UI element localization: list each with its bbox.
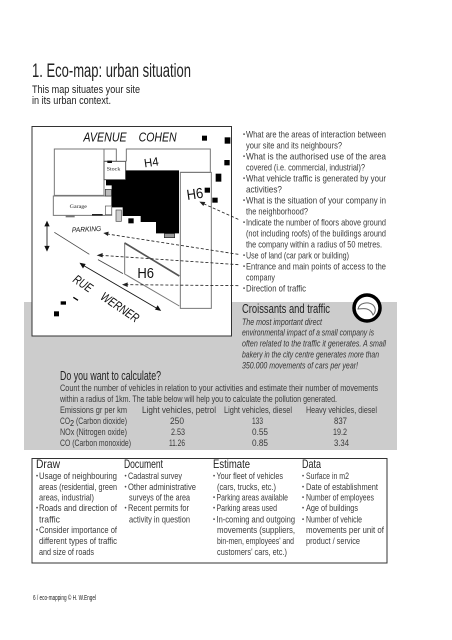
- column: estimate: customers' cars, etc.): [217, 547, 287, 558]
- double arrow: parking: [45, 222, 49, 251]
- column: draw: Draw: [36, 457, 60, 471]
- dashed leader lines: [101, 203, 238, 286]
- subtitle: This map situates your site: [32, 84, 140, 96]
- column: document: •: [124, 485, 127, 491]
- column: draw: areas, industrial): [39, 492, 94, 504]
- trees: [54, 136, 230, 316]
- column: estimate: In-coming and outgoing: [216, 514, 295, 526]
- column: data: •: [302, 485, 304, 491]
- emissions table: 11.26: [169, 438, 185, 449]
- question list: company: [246, 272, 275, 284]
- footer: 6 / eco-mapping © H. W.Engel: [33, 594, 96, 602]
- emissions table: (Carbon dioxide): [76, 416, 127, 427]
- question list: Use of land (car park or building): [246, 250, 349, 262]
- emissions table: CO (Carbon monoxide): [60, 438, 131, 449]
- column: document: Other administrative: [128, 482, 196, 493]
- building label: H6 lower: H6: [137, 266, 154, 282]
- question list: [243, 130, 387, 294]
- emissions table: CO: [60, 416, 70, 427]
- column: data: •: [302, 506, 304, 512]
- column: draw: •: [36, 474, 38, 480]
- question list: What is the situation of your company in: [246, 196, 386, 206]
- callout: croissants and traffic: bakery in the city centre generates more than: [242, 350, 379, 360]
- callout: croissants and traffic: often related to the traffic it generates. A small: [242, 338, 387, 348]
- question list: the company within a radius of 50 metres.: [246, 240, 382, 250]
- callout: croissants and traffic: environmental impact of a small company is: [242, 328, 374, 338]
- panel: urban map: [32, 126, 238, 336]
- callout: croissants and traffic: 350.000 movements of cars per year!: [242, 360, 358, 370]
- heading: do you want to calculate: Do you want to calculate?: [60, 369, 161, 383]
- question list: •: [243, 154, 245, 160]
- street label: Rue Werner: RUE: [70, 272, 96, 296]
- column: document: Cadastral survey: [128, 471, 182, 482]
- column: estimate: •: [213, 506, 215, 512]
- question list: your site and its neighbours?: [246, 140, 342, 152]
- column: document: •: [124, 474, 127, 480]
- column: data: Number of vehicle: [306, 514, 362, 526]
- question list: •: [243, 286, 245, 292]
- emissions table: [60, 405, 377, 449]
- arrow: direction of traffic: [80, 263, 160, 310]
- emissions table: 2: [70, 419, 74, 428]
- question list: covered (i.e. commercial, industrial)?: [246, 162, 365, 174]
- question list: activities?: [246, 184, 282, 196]
- column: estimate: bin-men, employees' and: [217, 536, 294, 547]
- question list: •: [243, 132, 245, 138]
- column: data: •: [302, 496, 304, 502]
- question list: What vehicle traffic is generated by your: [246, 174, 386, 184]
- grey background band: [24, 302, 397, 450]
- emissions table: Heavy vehicles, diesel: [306, 405, 377, 416]
- column: data: [302, 457, 384, 547]
- column: estimate: Estimate: [213, 457, 250, 471]
- street label: Avenue Cohen: COHEN: [139, 131, 177, 145]
- calculation intro text: within a radius of 1km. The table below will help you to calculate the pollution generated.: [59, 394, 337, 405]
- column: estimate: •: [213, 518, 215, 524]
- title: 1. Eco-map: urban situation: [32, 61, 191, 82]
- column: draw: and size of roads: [39, 547, 94, 558]
- callout: croissants and traffic: Croissants and traffic: [242, 302, 330, 316]
- column: data: Number of employees: [306, 492, 374, 504]
- emissions table: 2.53: [171, 427, 185, 438]
- small details: [66, 161, 175, 238]
- street label: Rue Werner: WERNER: [98, 290, 142, 325]
- column: document: Recent permits for: [128, 503, 189, 514]
- column: draw: Usage of neighbouring: [39, 471, 117, 482]
- emissions table: 3.34: [334, 438, 349, 449]
- column: document: activity in question: [129, 514, 190, 526]
- column: document: [124, 457, 196, 526]
- column: data: •: [302, 518, 304, 524]
- column: data: Age of buildings: [306, 503, 358, 514]
- emissions table: 19.2: [333, 427, 347, 438]
- column: data: Surface in m2: [306, 471, 349, 482]
- street label: Rue Werner: [70, 272, 142, 325]
- column: data: movements per unit of: [306, 525, 384, 536]
- emissions table: 250: [170, 416, 184, 427]
- building label: H6 upper: H6: [186, 186, 204, 204]
- street label: Avenue Cohen: AVENUE: [82, 131, 127, 145]
- callout: croissants and traffic: [242, 302, 387, 370]
- street label: Avenue Cohen: [82, 131, 177, 145]
- building outlines: [53, 149, 211, 308]
- subtitle: [32, 84, 140, 107]
- emissions table: NOx (Nitrogen oxide): [60, 427, 127, 438]
- column: draw: different types of traffic: [39, 536, 117, 547]
- column: data: product / service: [306, 536, 360, 547]
- callout: croissants and traffic: The most important direct: [242, 317, 322, 327]
- emissions table: 133: [252, 416, 263, 427]
- column: draw: •: [36, 528, 38, 534]
- question list: What is the authorised use of the area: [246, 152, 387, 162]
- column: estimate: •: [213, 474, 215, 480]
- leader arrowheads: [97, 202, 205, 287]
- emissions table: 0.55: [252, 427, 268, 438]
- stock building: [104, 161, 126, 180]
- question list: (not including roofs) of the buildings around: [246, 228, 386, 240]
- emissions table: Emissions gr per km: [60, 405, 127, 416]
- company site (black): [106, 170, 179, 233]
- emissions table: Light vehicles, petrol: [142, 405, 216, 416]
- column: document: •: [124, 506, 127, 512]
- column: draw: traffic: [39, 514, 60, 526]
- question list: •: [243, 198, 245, 204]
- column: estimate: (cars, trucks, etc.): [217, 482, 276, 493]
- column: estimate: [213, 457, 295, 558]
- column: draw: •: [36, 506, 38, 512]
- column: estimate: Parking areas available: [216, 492, 288, 504]
- question list: Direction of traffic: [246, 284, 306, 294]
- column: estimate: •: [213, 496, 215, 502]
- column: draw: Roads and direction of: [39, 503, 117, 514]
- question list: Indicate the number of floors above ground: [246, 218, 386, 228]
- column: draw: Consider importance of: [39, 525, 117, 536]
- column: estimate: movements (suppliers,: [217, 525, 295, 536]
- column: data: Date of establishment: [306, 482, 378, 493]
- emissions table: Light vehicles, diesel: [224, 405, 292, 416]
- stock label: Stock: [107, 167, 121, 172]
- garage label: Garage: [70, 205, 87, 210]
- column: data: •: [302, 474, 304, 480]
- column: data: Data: [302, 457, 321, 471]
- emissions table: 837: [334, 416, 347, 427]
- panel: checklist: [32, 457, 387, 563]
- road edges: [54, 232, 179, 276]
- column: draw: areas (residential, green: [39, 482, 117, 493]
- column: document: Document: [124, 457, 163, 471]
- question list: the neighborhood?: [246, 206, 308, 218]
- question list: •: [243, 220, 245, 226]
- map drawing: [45, 131, 238, 325]
- parking label: PARKING: [72, 226, 102, 234]
- question list: What are the areas of interaction between: [246, 130, 386, 140]
- emissions table: 0.85: [252, 438, 268, 449]
- building label: H4: H4: [143, 154, 160, 170]
- calculation intro text: [59, 383, 378, 405]
- column: estimate: Your fleet of vehicles: [216, 471, 283, 482]
- question list: •: [243, 254, 245, 260]
- icon: croissant: [354, 295, 380, 321]
- column: document: surveys of the area: [129, 492, 191, 504]
- question list: •: [243, 176, 245, 182]
- column: draw: [36, 457, 117, 558]
- column: estimate: Parking areas used: [216, 503, 277, 514]
- question list: Entrance and main points of access to the: [246, 262, 386, 272]
- question list: •: [243, 264, 245, 270]
- subtitle: in its urban context.: [32, 95, 111, 107]
